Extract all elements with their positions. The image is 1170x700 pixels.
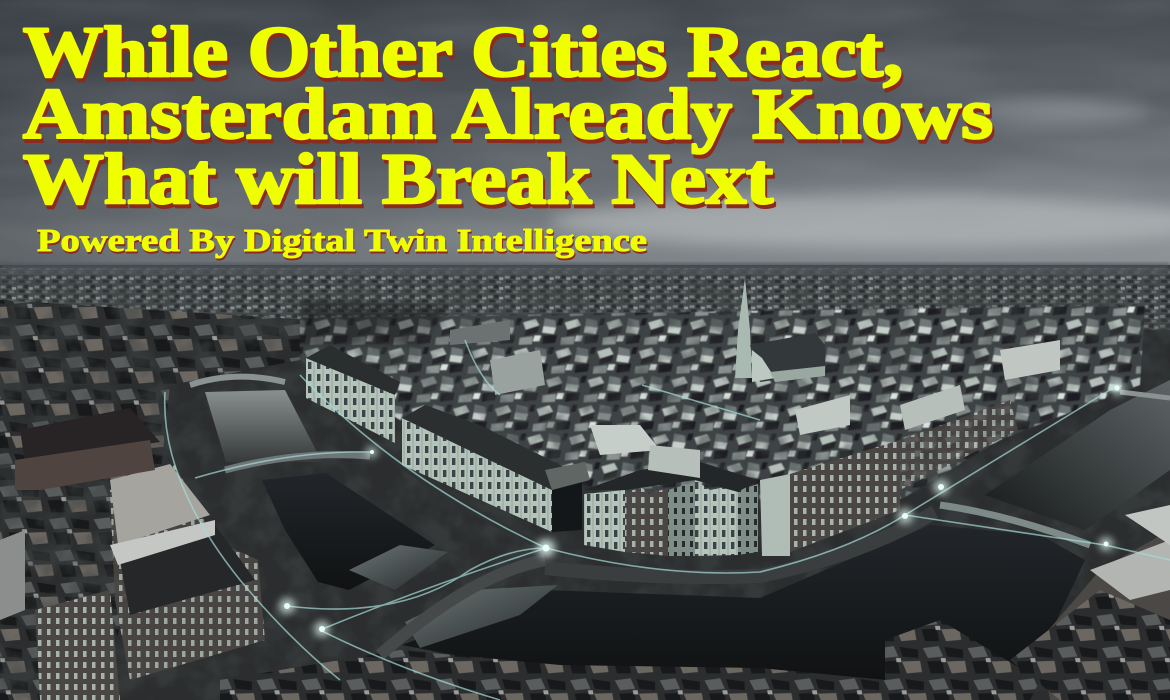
bridges: [190, 377, 1170, 655]
building strip: bottom centre rooftops: [220, 650, 885, 700]
background: aerial city of Amsterdam: [0, 263, 1170, 700]
building row: centre gabled houses: [584, 462, 758, 556]
title shadow: What will Break Next: [25, 143, 775, 223]
title text: [23, 12, 993, 219]
building row: right: [760, 400, 1018, 556]
canal: middle left: [262, 473, 435, 590]
background: sky: [0, 0, 1170, 275]
glowing network nodes: [279, 381, 1124, 637]
variation over the rooftops: [0, 275, 1170, 700]
title text: While Other Cities React,: [23, 12, 903, 92]
building block: bottom right: [885, 505, 1170, 700]
left dark quarter: [0, 300, 310, 700]
river: right: [985, 380, 1170, 530]
central rooftops: [300, 305, 1145, 500]
title text: Amsterdam Already Knows: [23, 74, 993, 154]
river: bottom centre: [402, 525, 1085, 680]
church: [735, 278, 825, 382]
digital twin network lines: [165, 340, 1170, 700]
building row: canal houses: [402, 405, 590, 532]
title text: What will Break Next: [23, 139, 773, 219]
title shadow: Amsterdam Already Knows: [25, 78, 995, 158]
glass canopy: lower: [405, 585, 558, 648]
subtitle: Powered By Digital Twin Intelligence: [38, 224, 648, 260]
far rooftops: [0, 268, 1170, 330]
building block: bottom left: [0, 408, 265, 700]
title shadow: While Other Cities React,: [25, 16, 905, 96]
subtitle: Powered By Digital Twin Intelligence: [37, 222, 647, 258]
glass canopy: middle: [349, 545, 448, 590]
canal: upper left: [205, 390, 322, 462]
title: [23, 12, 995, 223]
lit roofs: [450, 320, 1060, 478]
title shadow: [25, 16, 995, 223]
quay: centre road: [545, 512, 935, 577]
building row: upper canal houses: [306, 345, 400, 443]
